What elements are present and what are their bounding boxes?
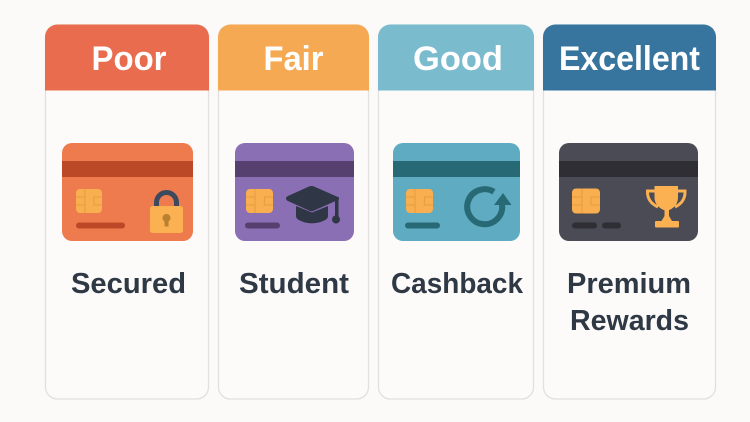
header: Poor [45,24,209,90]
header: Poor: Poor [92,40,166,78]
card: student with graduation cap [235,143,354,241]
panel: Good / Cashback [378,24,534,399]
label: Premium Rewards: Premium [567,268,691,300]
card: cashback with circular arrow [393,143,520,241]
panel: Fair / Student [218,24,369,399]
header: Fair [218,24,369,90]
header: Good: Good [413,40,503,78]
label: Student: Student [239,268,349,300]
panel: Excellent / Premium Rewards [543,24,716,399]
header: Good [378,24,534,90]
icon: trophy [647,186,685,228]
header: Excellent: Excellent [559,40,700,78]
card: premium with trophy [559,143,698,241]
card: secured with lock [62,143,193,241]
header: Excellent [543,24,716,90]
label: Cashback: Cashback [391,268,524,300]
label: Premium Rewards: Rewards [570,305,689,337]
panel: Poor / Secured [45,24,209,399]
header: Fair: Fair [264,40,324,78]
label: Secured: Secured [71,268,186,300]
icon: circular arrow [467,189,512,224]
icon: graduation cap [286,186,340,224]
icon: padlock [150,193,183,233]
label: Premium Rewards [567,268,691,337]
